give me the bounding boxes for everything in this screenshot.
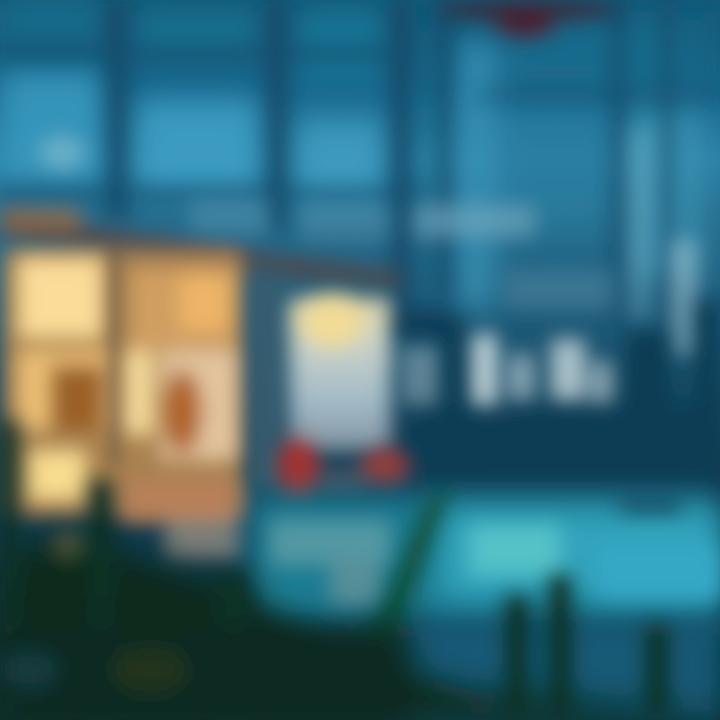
pool: turquoise water: [250, 495, 720, 625]
bright pillars at centre right: [472, 335, 612, 405]
centre: grey column: [248, 270, 284, 490]
room: bright panels: [18, 258, 240, 558]
red chairs: [278, 438, 409, 498]
room: roof band: [0, 208, 400, 288]
room: warm lit interior: [0, 208, 400, 558]
window frame: dark vertical mullions: [106, 0, 672, 330]
ceiling lamp: dark shape at top: [438, 0, 618, 38]
room: base glow: [4, 250, 242, 515]
dark silhouettes of distant buildings: [395, 300, 720, 470]
centre: white lit room with lamp: [290, 296, 440, 450]
window frame: dark horizontal bars: [0, 46, 720, 200]
glass panes: lit sky reflections: [0, 0, 700, 310]
room: dark column: [106, 245, 122, 465]
foreground: dark lower water: [400, 620, 720, 720]
foreground: dark green plants: [0, 420, 720, 720]
pale reflections: upper right and centre: [40, 130, 696, 355]
